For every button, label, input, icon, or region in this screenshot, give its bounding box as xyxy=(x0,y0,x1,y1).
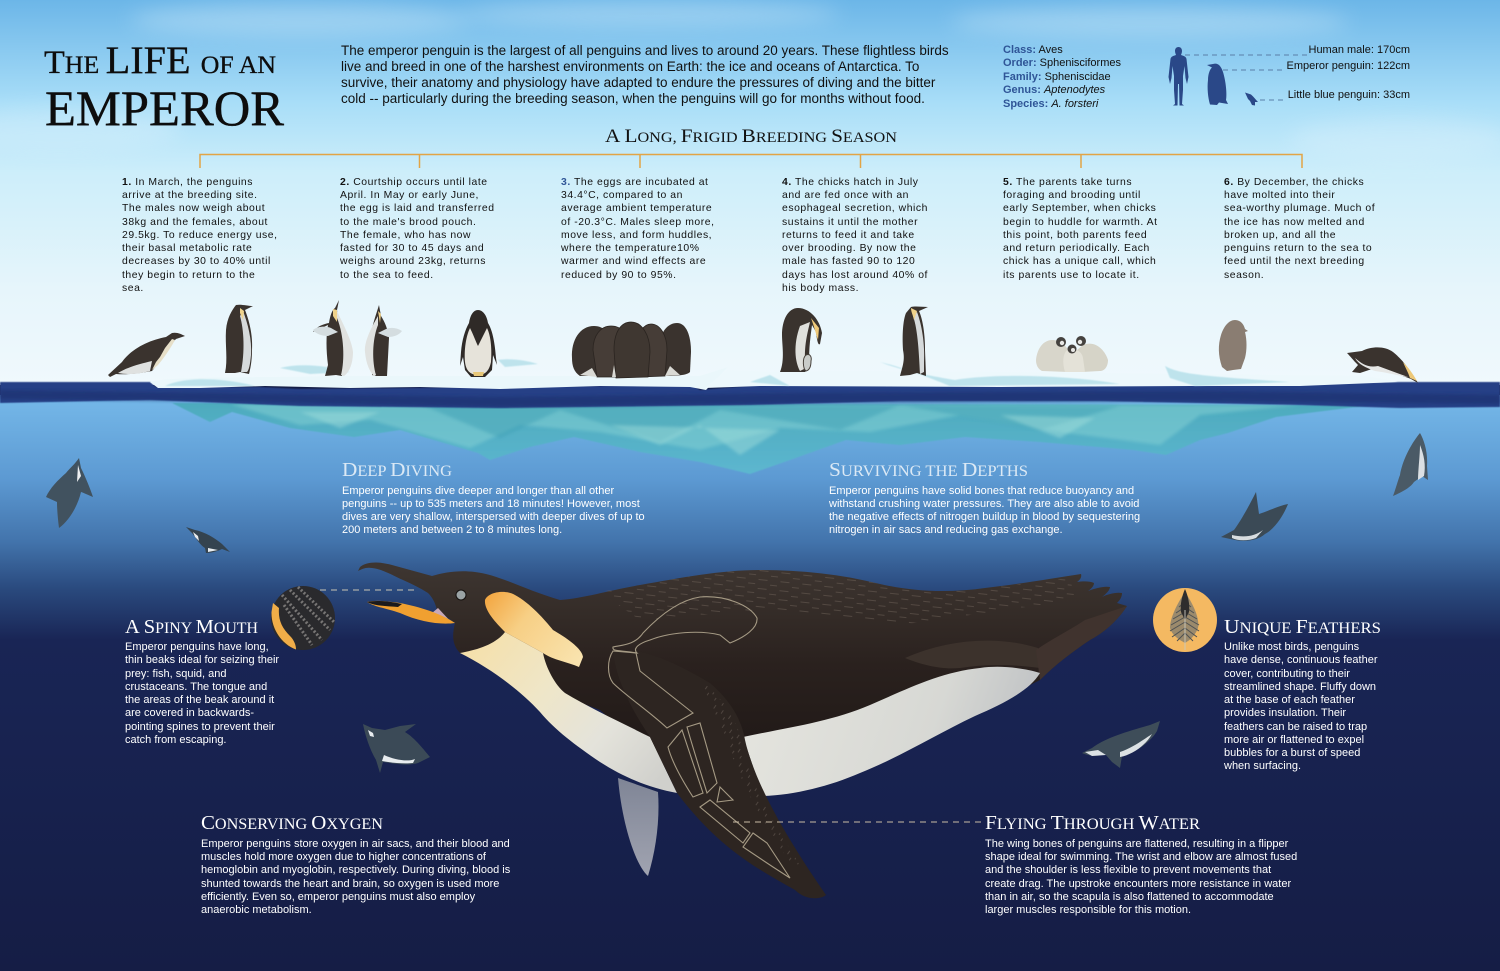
main emperor penguin xyxy=(358,563,1127,898)
step 4 text: returns to feed it and take xyxy=(782,230,915,241)
inset: spiny mouth xyxy=(271,586,335,650)
title xyxy=(44,39,285,136)
step 4 text: days has lost around 40% of xyxy=(782,270,928,281)
unique feathers: bubbles for a burst of speed xyxy=(1224,747,1360,759)
underwater penguin: near beak xyxy=(363,724,430,773)
flipper xyxy=(613,649,826,898)
clouds xyxy=(0,1,1500,162)
step 1 text: decreases by 30 to 40% until xyxy=(122,256,271,267)
ear patch xyxy=(485,592,583,667)
lower back sheen xyxy=(905,641,1040,668)
step 6 text: penguins return to the sea to xyxy=(1224,243,1372,254)
underwater penguin: right upper xyxy=(1393,433,1428,496)
surviving the depths: SURVIVING THE DEPTHS xyxy=(829,459,1028,481)
flying through water: and the shoulder is less flexible to prevent movements that xyxy=(985,864,1271,876)
step 6 text: the ice has now melted and xyxy=(1224,217,1365,228)
icon: human silhouette xyxy=(1168,47,1188,106)
flying through water: shape ideal for swimming. The wrist and elbow are almost fused xyxy=(985,851,1297,863)
taxonomy: Species: A. forsteri xyxy=(1003,98,1099,110)
step 5 text: foraging and brooding until xyxy=(1003,190,1141,201)
step 4 text: sustains it until the mother xyxy=(782,217,918,228)
intro text: survive, their anatomy and physiology have adapted to endure the pressures of diving and the bitter xyxy=(341,75,936,90)
step 3 text: where the temperature10% xyxy=(560,243,700,254)
conserving oxygen xyxy=(201,812,511,916)
step 4 text: and are fed once with an xyxy=(782,190,909,201)
surviving the depths: Emperor penguins have solid bones that reduce buoyancy and xyxy=(829,485,1134,497)
step 3 text: of -20.3°C. Males sleep more, xyxy=(561,217,715,228)
section heading: breeding season: A LONG, FRIGID BREEDING SEASON xyxy=(605,126,898,147)
size labels xyxy=(1286,44,1410,101)
step 4 text: male has fasted 90 to 120 xyxy=(782,256,915,267)
conserving oxygen: anaerobic metabolism. xyxy=(201,904,312,916)
dashed leader: wing xyxy=(733,821,983,823)
water surface band xyxy=(0,382,1500,408)
unique feathers: at the base of each feather xyxy=(1224,694,1355,706)
a spiny mouth: A SPINY MOUTH xyxy=(125,616,258,638)
surviving the depths xyxy=(828,459,1140,536)
a spiny mouth: Emperor penguins have long, xyxy=(125,641,269,653)
step 5 text: and return periodically. Each xyxy=(1003,243,1150,254)
chest xyxy=(460,632,677,793)
a spiny mouth: catch from escaping. xyxy=(125,734,226,746)
underwater penguin: left diving xyxy=(46,458,93,528)
step 2 text: April. In May or early June, xyxy=(340,190,479,201)
step 3 text: 3. The eggs are incubated at xyxy=(561,177,708,188)
ice shelf xyxy=(150,359,1398,390)
deep diving: 200 meters and between 2 to 8 minutes long. xyxy=(342,524,562,536)
unique feathers: cover, contributing to their xyxy=(1224,668,1350,680)
step 2 text: The female, who has now xyxy=(340,230,471,241)
unique feathers: feathers can be raised to trap xyxy=(1224,721,1367,733)
size comparison xyxy=(1168,44,1410,106)
step 5 text: begin to huddle for warmth. At xyxy=(1003,217,1158,228)
step 6 text: feed until the next breeding xyxy=(1224,256,1365,267)
step 2 text: weighs around 23kg, returns xyxy=(339,256,486,267)
surviving the depths: the negative effects of nitrogen buildup in blood by sequestering xyxy=(829,511,1140,523)
deep diving: penguins -- up to 535 meters and 18 minutes! However, most xyxy=(342,498,640,510)
taxonomy: Family: Spheniscidae xyxy=(1003,71,1111,83)
step 4 text: esophageal secretion, which xyxy=(782,203,928,214)
timeline bracket xyxy=(200,154,1302,168)
penguin: front view xyxy=(460,310,497,377)
step 5 text: its parents use to locate it. xyxy=(1003,270,1140,281)
penguin: leaning to the sea xyxy=(108,333,185,377)
penguin: lone adult xyxy=(900,307,928,376)
step 1 text: 38kg and the females, about xyxy=(122,217,268,228)
step 6 text: broken up, and all the xyxy=(1224,230,1336,241)
dashed leader: mouth xyxy=(320,589,414,591)
taxonomy: Order: Sphenisciformes xyxy=(1003,57,1121,69)
deep diving xyxy=(342,459,645,536)
title: THE LIFE OF AN xyxy=(44,39,276,82)
flying through water: FLYING THROUGH WATER xyxy=(985,812,1201,834)
unique feathers: UNIQUE FEATHERS xyxy=(1224,616,1381,638)
back plumage texture xyxy=(600,570,1075,625)
step 6 text: 6. By December, the chicks xyxy=(1224,177,1364,188)
underwater penguin: right middle xyxy=(1221,492,1288,541)
a spiny mouth: are covered in backwards- xyxy=(125,707,254,719)
step 5 text: 5. The parents take turns xyxy=(1003,177,1132,188)
a spiny mouth: pointing spines to prevent their xyxy=(125,721,275,733)
icon: chick xyxy=(803,354,811,371)
step 6 text: sea-worthy plumage. Much of xyxy=(1224,203,1375,214)
flying through water: than in air, so the scapula is also flattened to accommodate xyxy=(985,891,1274,903)
conserving oxygen: efficiently. Even so, emperor penguins must also employ xyxy=(201,891,476,903)
surviving the depths: nitrogen in air sacs and reducing gas exchange. xyxy=(829,524,1063,536)
step 5 text: early September, when chicks xyxy=(1003,203,1156,214)
step 5 text: chick has a unique call, which xyxy=(1003,256,1156,267)
unique feathers xyxy=(1223,616,1381,772)
intro text: cold -- particularly during the breeding season, when the penguins will go for months without food. xyxy=(341,91,925,106)
juvenile penguin xyxy=(1219,320,1248,371)
size labels: Emperor penguin: 122cm xyxy=(1286,60,1410,72)
conserving oxygen: hemoglobin and myoglobin, respectively. During diving, blood is xyxy=(201,864,511,876)
step 1 text: their basal metabolic rate xyxy=(122,243,252,254)
conserving oxygen: shunted towards the heart and brain, so oxygen is used more xyxy=(201,878,499,890)
taxonomy: Genus: Aptenodytes xyxy=(1003,84,1106,96)
penguins: courtship pair xyxy=(313,300,402,376)
flying through water xyxy=(985,812,1297,916)
step 4 text: over brooding. By now the xyxy=(782,243,916,254)
unique feathers: more air or flattened to expel xyxy=(1224,734,1364,746)
step 2 text: the egg is laid and transferred xyxy=(340,203,495,214)
step 6 text: have molted into their xyxy=(1224,190,1335,201)
step 5 text: this point, both parents feed xyxy=(1003,230,1147,241)
step 6 text: season. xyxy=(1224,270,1264,281)
underwater penguin: small left xyxy=(186,527,230,553)
step 1 text: sea. xyxy=(122,283,144,294)
size labels: Human male: 170cm xyxy=(1308,44,1410,56)
unique feathers: Unlike most birds, penguins xyxy=(1224,641,1359,653)
a spiny mouth: crustaceans. The tongue and xyxy=(125,681,267,693)
step 1 text: The males now weigh about xyxy=(122,203,265,214)
deep diving: Emperor penguins dive deeper and longer than all other xyxy=(342,485,614,497)
deep diving: DEEP DIVING xyxy=(342,459,452,481)
conserving oxygen: muscles hold more oxygen due to higher concentrations of xyxy=(201,851,487,863)
icon: little blue silhouette xyxy=(1245,92,1258,106)
step 3 text: move less, and form huddles, xyxy=(561,230,712,241)
penguin: adult brooding chick xyxy=(780,308,822,372)
a spiny mouth: prey: fish, squid, and xyxy=(125,668,227,680)
body xyxy=(358,563,1127,790)
step 3 text: reduced by 90 to 95%. xyxy=(561,270,677,281)
step 1 text: 29.5kg. To reduce energy use, xyxy=(122,230,278,241)
flying through water: larger muscles responsible for this motion. xyxy=(985,904,1191,916)
step 2 text: 2. Courtship occurs until late xyxy=(340,177,488,188)
penguin: standing adult xyxy=(225,305,253,374)
step 1 text: 1. In March, the penguins xyxy=(122,177,253,188)
intro text: live and breed in one of the harshest environments on Earth: the ice and oceans of Antarctica. To xyxy=(341,59,919,74)
unique feathers: provides insulation. Their xyxy=(1224,707,1346,719)
step 2 text: to the male's brood pouch. xyxy=(340,217,476,228)
ocean background xyxy=(0,395,1500,971)
step 3 text: 34.4°C, compared to an xyxy=(561,190,683,201)
submerged iceberg xyxy=(172,403,1372,474)
underwater penguin: lower right xyxy=(1082,721,1160,768)
icon: emperor silhouette xyxy=(1207,64,1228,105)
step 1 text: they begin to return to the xyxy=(122,270,255,281)
title: EMPEROR xyxy=(45,80,285,136)
step 4 text: his body mass. xyxy=(782,283,859,294)
size labels: Little blue penguin: 33cm xyxy=(1288,89,1410,101)
unique feathers: when surfacing. xyxy=(1223,760,1301,772)
taxonomy: Class: Aves xyxy=(1003,44,1063,56)
penguin: diving into sea xyxy=(1347,347,1418,383)
skeleton outline xyxy=(608,597,790,878)
eye xyxy=(456,590,466,600)
belly xyxy=(743,667,1040,796)
sky background xyxy=(0,0,1500,385)
step 1 text: arrive at the breeding site. xyxy=(122,190,258,201)
flying through water: create drag. The upstroke encounters more resistance in water xyxy=(985,878,1291,890)
taxonomy xyxy=(1003,44,1121,110)
step 4 text: 4. The chicks hatch in July xyxy=(782,177,919,188)
flying through water: The wing bones of penguins are flattened, resulting in a flipper xyxy=(985,838,1288,850)
conserving oxygen: CONSERVING OXYGEN xyxy=(201,812,383,834)
deep diving: dives are very shallow, interspersed with deeper dives of up to xyxy=(342,511,645,523)
step 3 text: warmer and wind effects are xyxy=(560,256,706,267)
penguin chicks xyxy=(1036,336,1108,372)
step 2 text: fasted for 30 to 45 days and xyxy=(340,243,484,254)
a spiny mouth xyxy=(125,616,279,746)
intro text xyxy=(341,43,949,106)
unique feathers: streamlined shape. Fluffy down xyxy=(1224,681,1376,693)
intro text: The emperor penguin is the largest of all penguins and lives to around 20 years. These flightless birds xyxy=(341,43,949,58)
step 2 text: to the sea to feed. xyxy=(340,270,434,281)
surviving the depths: withstand crushing water pressures. They are also able to avoid xyxy=(828,498,1139,510)
a spiny mouth: thin beaks ideal for seizing their xyxy=(125,654,279,666)
penguin huddle xyxy=(572,322,691,378)
a spiny mouth: the areas of the beak around it xyxy=(125,694,274,706)
unique feathers: have dense, continuous feather xyxy=(1224,654,1378,666)
conserving oxygen: Emperor penguins store oxygen in air sacs, and their blood and xyxy=(201,838,510,850)
rear flipper xyxy=(618,778,659,876)
step 3 text: average ambient temperature xyxy=(561,203,712,214)
inset: feather xyxy=(1153,588,1217,652)
tail and foot xyxy=(1036,606,1127,680)
mouth xyxy=(367,601,455,624)
